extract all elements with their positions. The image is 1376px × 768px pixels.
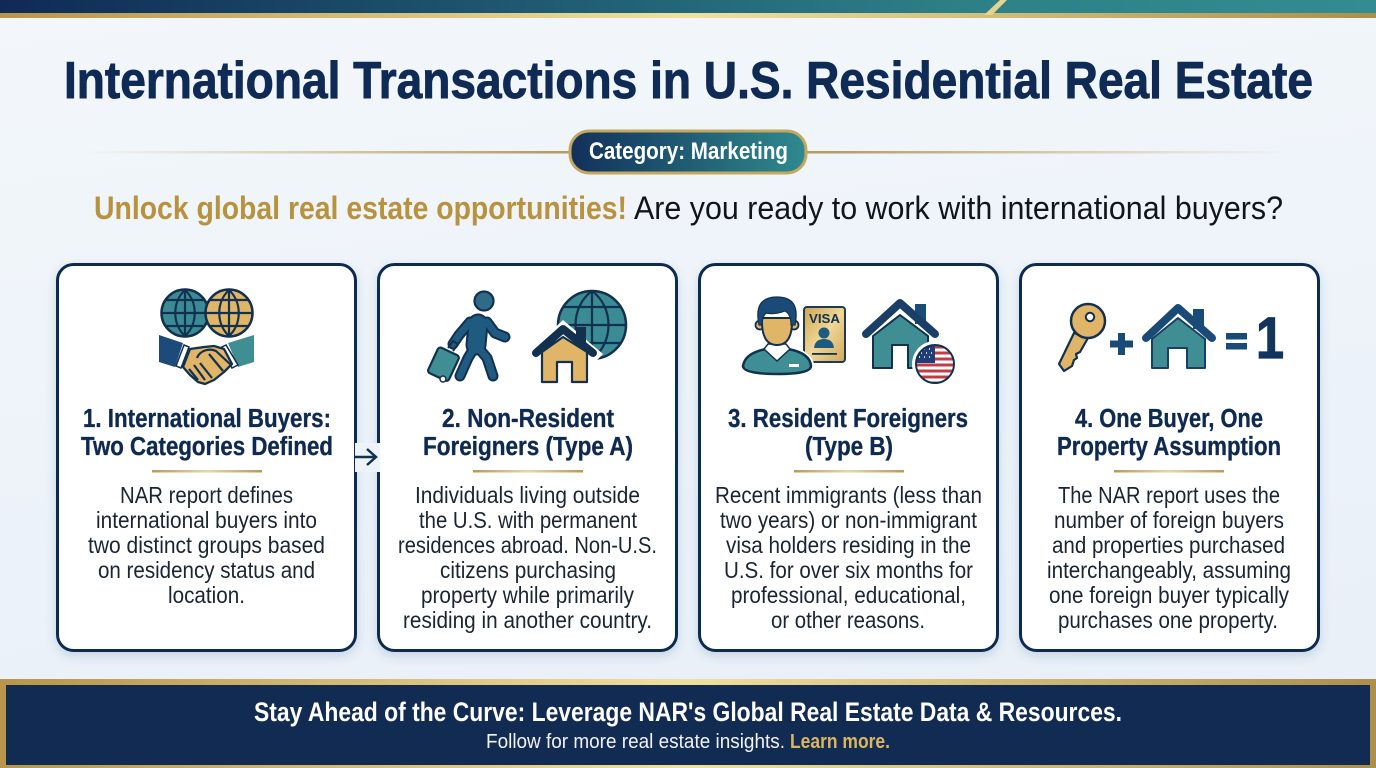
icon: visa card xyxy=(804,307,845,362)
gold divider xyxy=(1114,470,1224,472)
body text: Recent immigrants (less than xyxy=(715,482,982,508)
heading: 4. One Buyer, One xyxy=(1075,405,1263,433)
body text: international buyers into xyxy=(96,507,317,533)
footer headline: Stay Ahead of the Curve: Leverage NAR's Global Real Estate Data & Resources. xyxy=(254,697,1122,727)
body text: on residency status and xyxy=(98,557,315,583)
heading: Foreigners (Type A) xyxy=(423,433,633,461)
heading: (Type B) xyxy=(805,433,893,461)
body text: location. xyxy=(168,582,245,608)
heading xyxy=(1057,405,1281,461)
body text xyxy=(88,482,325,608)
body text: citizens purchasing xyxy=(440,557,616,583)
heading xyxy=(423,405,633,461)
body text xyxy=(398,482,657,633)
heading: Property Assumption xyxy=(1057,433,1281,461)
arrow between cards xyxy=(355,443,380,472)
body text: NAR report defines xyxy=(120,482,293,508)
body text: residences abroad. Non-U.S. xyxy=(398,532,657,558)
body text: professional, educational, xyxy=(731,582,966,608)
panel: card 2 non-resident foreigners xyxy=(378,264,676,650)
gold divider xyxy=(152,470,262,472)
body text: property while primarily xyxy=(421,582,634,608)
footer call to action: Follow for more real estate insights. xyxy=(486,731,785,753)
panel: card 4 one buyer one property xyxy=(1020,264,1318,650)
body text: residing in another country. xyxy=(403,607,652,633)
icon: traveler with suitcase, house and globe xyxy=(427,291,626,385)
body text: and properties purchased xyxy=(1052,532,1285,558)
body text: one foreign buyer typically xyxy=(1049,582,1289,608)
tagline xyxy=(94,190,1283,226)
body text: or other reasons. xyxy=(771,607,925,633)
body text: the U.S. with permanent xyxy=(419,507,638,533)
footer banner xyxy=(0,679,1376,768)
panel: card 1 international buyers xyxy=(58,264,356,650)
body text: number of foreign buyers xyxy=(1054,507,1284,533)
tagline: Unlock global real estate opportunities! xyxy=(94,190,627,226)
heading: Two Categories Defined xyxy=(81,433,333,461)
panel: card 3 resident foreigners xyxy=(700,264,998,650)
tagline: Are you ready to work with international buyers? xyxy=(634,190,1283,226)
gold divider xyxy=(473,470,583,472)
body text: two distinct groups based xyxy=(88,532,325,558)
body text: visa holders residing in the xyxy=(726,532,971,558)
footer call to action: Learn more. xyxy=(790,731,890,753)
body text xyxy=(1047,482,1291,633)
body text: The NAR report uses the xyxy=(1058,482,1280,508)
category pill xyxy=(570,131,806,173)
heading: 2. Non-Resident xyxy=(442,405,614,433)
body text xyxy=(715,482,982,633)
body text: interchangeably, assuming xyxy=(1047,557,1291,583)
divider line behind category pill xyxy=(85,151,1293,154)
body text: two years) or non-immigrant xyxy=(720,507,978,533)
icon: key plus house equals one xyxy=(1059,304,1284,371)
icon: globes and handshake xyxy=(159,290,254,384)
category pill: Category: Marketing xyxy=(589,138,788,165)
heading: 1. International Buyers: xyxy=(83,405,331,433)
icon: person xyxy=(742,297,812,375)
gold divider xyxy=(794,470,904,472)
top banner xyxy=(0,0,1376,18)
icon: visa card: VISA xyxy=(809,312,840,326)
body text: Individuals living outside xyxy=(415,482,640,508)
icon: house with US flag xyxy=(866,303,958,387)
heading: 3. Resident Foreigners xyxy=(728,405,968,433)
heading xyxy=(81,405,333,461)
body text: purchases one property. xyxy=(1058,607,1278,633)
body text: U.S. for over six months for xyxy=(724,557,973,583)
icon: key plus house equals one: 1 xyxy=(1256,306,1284,371)
heading xyxy=(728,405,968,461)
